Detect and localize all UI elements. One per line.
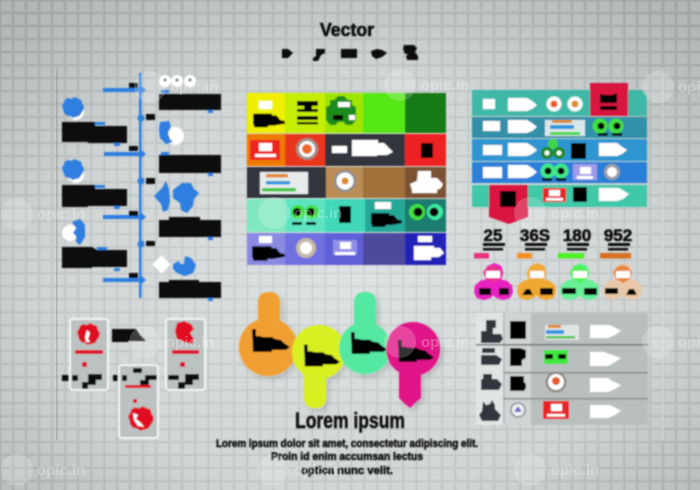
watermark: opic.in [421,334,469,351]
watermark: opic.in [37,206,85,223]
row 3 tiles [247,167,446,198]
table column 2 icons [510,321,526,391]
watermark: opic.in [294,462,342,479]
table column 2 badge [510,402,526,418]
body text: Lorem ipsum dolor sit amet, consectetur adipiscing elit. [216,438,478,450]
numbers: 180 [563,226,591,245]
panel: red cards [62,319,205,438]
numbers: 952 [604,226,632,245]
watermark: opic.in [170,79,218,96]
watermark: opic.in [551,205,599,222]
black fragments [62,368,199,389]
watermark: opic.in [166,334,214,351]
red ribbon: bottom [489,185,528,224]
panel: location pins [239,292,440,408]
numbers [483,226,632,250]
timeline arrows [103,84,146,286]
watermark: opic.in [551,462,599,479]
table column 1 icons [479,320,503,421]
pin orange [239,292,297,376]
icon row under heading [282,45,418,61]
panel: numbers with org charts [474,226,642,300]
pin yellow [292,325,346,408]
pin pink [386,322,440,408]
body text: optica nunc velit. [301,465,393,477]
heading: Vector: Vector [320,20,374,40]
org chart pink [474,263,513,300]
body text: Proin id enim accumsan lectus [271,451,423,463]
band 5 [472,185,647,207]
row 2 tiles [247,134,446,166]
icon: blue globes [62,97,199,276]
panel: teal and blue bands [472,83,647,224]
row 5 tiles [247,233,446,265]
row 4 tiles [247,199,446,232]
row 1 tiles [247,93,446,133]
numbers: 25 [484,226,502,245]
timeline axis [139,73,142,298]
red tab: top [590,83,628,116]
numbers: 36S [520,226,550,245]
icon: white circles [62,75,196,274]
band 2 [472,117,647,138]
black arrow label [112,329,146,342]
small blue accents [95,90,213,301]
body text [216,438,478,477]
panel: blue timeline [62,73,221,301]
band 1 [472,90,647,116]
panel: colour tile grid [247,93,446,265]
org chart green [560,263,599,300]
org chart peach [603,263,642,300]
org chart orange [517,263,556,300]
right text blocks [159,94,221,298]
watermark: opic.in [37,462,85,479]
band 4 [472,162,647,183]
left text blocks [62,122,127,268]
heading: Lorem ipsum: Lorem ipsum [295,408,405,433]
card 3 [166,319,205,390]
panel: icon table [476,313,648,425]
card 2 [119,365,158,438]
table white labels [590,325,621,418]
watermark: opic.in [294,205,342,222]
watermark: opic.in [421,77,469,94]
coloured label bars [474,253,631,258]
pin green [339,292,391,374]
table content icons [543,325,579,419]
timeline tags [129,83,155,278]
band 3 [472,139,647,161]
card 1 [70,319,108,390]
